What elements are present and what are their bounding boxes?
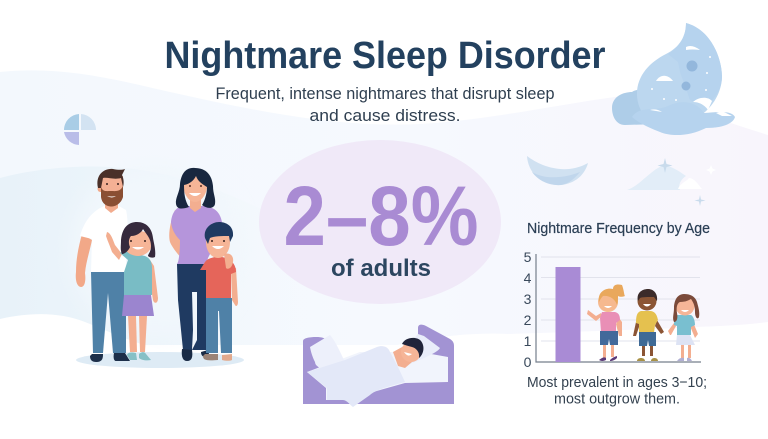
small white clouds (650, 46, 732, 116)
icon: moon with clouds (612, 23, 735, 135)
illustration: family (76, 168, 244, 368)
axis labels: 4 (524, 270, 532, 286)
chart caption: most outgrow them. (554, 390, 680, 408)
axis labels: 0 (524, 354, 532, 370)
callout: 2–8% of adults (259, 140, 501, 304)
subtitle (216, 84, 554, 125)
chart caption (527, 374, 707, 408)
child: boy in yellow shirt (633, 289, 664, 361)
statistic label: of adults (331, 255, 431, 282)
icon: pie chart (64, 114, 96, 145)
father (76, 169, 130, 362)
gridlines (541, 257, 700, 341)
title: Nightmare Sleep Disorder (164, 35, 606, 77)
axis labels: 3 (524, 291, 532, 307)
chart: nightmare frequency by age (524, 221, 710, 408)
axis labels (524, 249, 532, 370)
child: girl with ponytail (587, 284, 625, 361)
girl (106, 222, 158, 360)
chart caption: Most prevalent in ages 3−10; (527, 374, 707, 391)
subtitle: and cause distress. (310, 106, 460, 125)
ground shadow (76, 352, 244, 368)
axis labels: 5 (524, 249, 532, 265)
head and shoulder (393, 346, 412, 368)
illustration: sleeping person in bed (303, 325, 454, 407)
icon: faint cloud and stars (627, 158, 716, 206)
icon: crescent moon (527, 156, 588, 185)
axis labels: 2 (524, 312, 532, 328)
axis lines (536, 254, 701, 362)
near pillow (310, 335, 345, 372)
chart title: Nightmare Frequency by Age (527, 221, 710, 237)
mother (169, 168, 222, 361)
moon craters (682, 60, 698, 90)
far pillow (402, 334, 440, 366)
subtitle: Frequent, intense nightmares that disrupt sleep (216, 84, 554, 103)
bed frame (303, 337, 336, 404)
blanket (307, 346, 405, 407)
axis labels: 1 (524, 333, 532, 349)
big statistic: 2–8% (284, 169, 478, 263)
boy (200, 222, 238, 361)
child: girl in teal shirt (668, 294, 699, 361)
bar (556, 267, 580, 362)
mattress (307, 352, 448, 400)
